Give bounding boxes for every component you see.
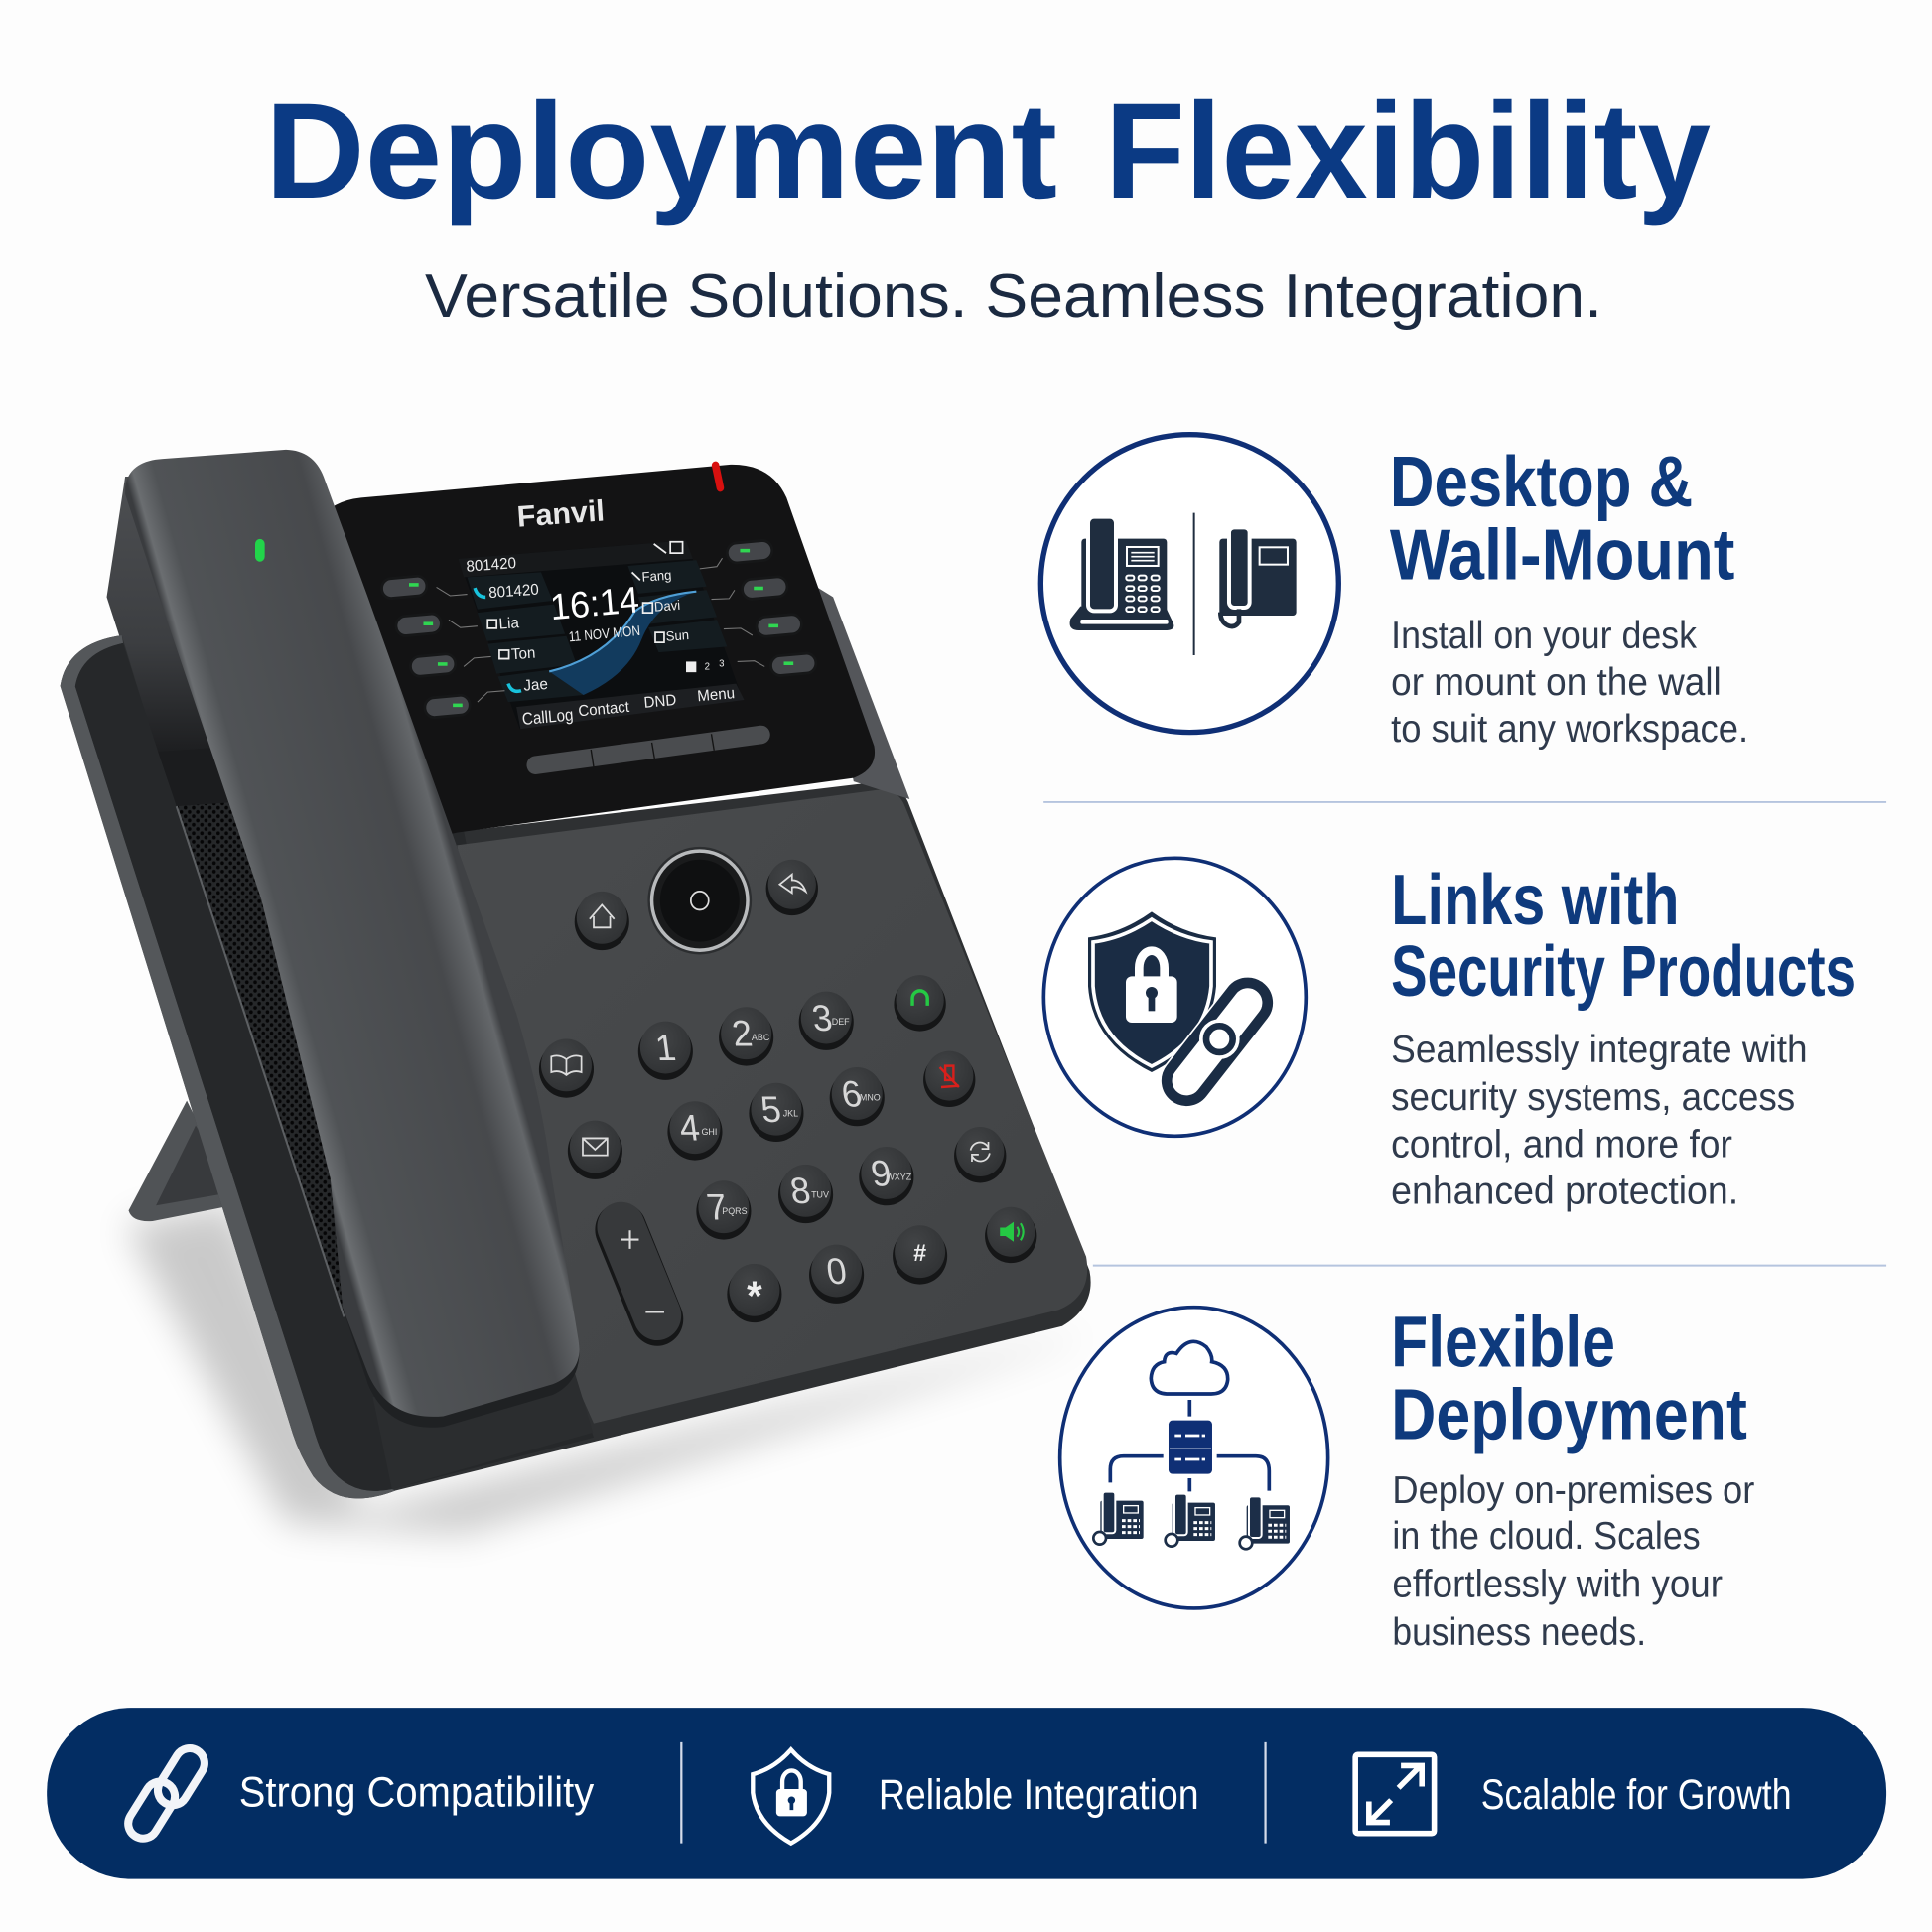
line keys <box>381 540 817 718</box>
screen panel <box>327 465 875 842</box>
keypad buttons: 2 <box>730 1013 755 1054</box>
body: security products: Seamlessly integrate with <box>1391 1029 1808 1071</box>
label: strong compatibility: Strong Compatibility <box>239 1768 595 1815</box>
display wallpaper swoosh <box>549 592 696 695</box>
phone display: Davi <box>653 598 681 615</box>
keypad buttons: JKL <box>783 1108 798 1118</box>
body: desktop and wall-mount <box>1391 615 1748 751</box>
heading: security products: Links with <box>1391 861 1680 940</box>
phone display <box>459 540 745 729</box>
cloud <box>1151 1341 1228 1394</box>
phone display: Lia <box>498 615 520 633</box>
handset lip shadow <box>343 1308 580 1428</box>
body: flexible deployment: business needs. <box>1392 1611 1646 1654</box>
keypad buttons: 9 <box>869 1153 894 1193</box>
bottom benefits bar <box>47 1708 1886 1879</box>
screen panel side edge <box>816 587 909 799</box>
keypad buttons: * <box>747 1273 762 1318</box>
title: Flexibility <box>1105 75 1711 227</box>
phone display: Sun <box>665 627 689 644</box>
heading: security products <box>1391 861 1856 1012</box>
keypad buttons: 5 <box>759 1089 783 1130</box>
feature icon: shield and link <box>1043 858 1306 1136</box>
keypad buttons: # <box>913 1240 926 1267</box>
soft keys <box>535 734 761 767</box>
phone display: Fang <box>641 567 672 585</box>
body: flexible deployment <box>1392 1469 1754 1654</box>
subtitle: Versatile Solutions. Seamless Integration. <box>425 262 1602 331</box>
network phone 1 <box>1093 1492 1144 1545</box>
keypad buttons: 8 <box>787 1171 813 1211</box>
phone display: Contact <box>578 699 630 720</box>
network phone 3 <box>1240 1496 1290 1549</box>
body: security products: control, and more for <box>1391 1123 1732 1166</box>
feature icon: desktop and wall phones <box>1040 435 1338 733</box>
body: flexible deployment: in the cloud. Scales <box>1392 1515 1701 1558</box>
back plate <box>75 643 594 1491</box>
kickstand <box>129 1101 224 1221</box>
phone display: 11 NOV MON <box>568 622 641 644</box>
feature icon: cloud deployment <box>1060 1308 1328 1608</box>
keypad buttons: DEF <box>832 1017 850 1027</box>
keypad plate <box>457 790 1087 1424</box>
phone display: 801420 <box>488 581 539 602</box>
keypad buttons: 6 <box>839 1073 865 1114</box>
keypad buttons: MNO <box>860 1092 881 1103</box>
navigation ring <box>647 847 752 954</box>
icon: scale arrows <box>1355 1754 1435 1834</box>
body: flexible deployment: effortlessly with your <box>1392 1563 1723 1605</box>
heading: desktop and wall-mount: Desktop & <box>1390 443 1693 522</box>
handset cradle foot <box>372 1370 593 1489</box>
phone product illustration <box>61 450 1091 1533</box>
handset back <box>107 477 265 754</box>
speaker grille <box>158 746 381 1349</box>
handset status LED <box>255 539 265 562</box>
keypad buttons: ABC <box>752 1033 770 1042</box>
heading: flexible deployment <box>1391 1303 1747 1455</box>
label: scalable for growth: Scalable for Growth <box>1481 1771 1792 1818</box>
title <box>265 75 1711 227</box>
icon: shield lock <box>753 1749 829 1844</box>
keypad buttons: 1 <box>653 1027 678 1068</box>
phone display: CallLog <box>521 705 574 729</box>
keypad buttons <box>539 860 1036 1322</box>
keypad buttons: TUV <box>811 1189 830 1199</box>
body: security products: security systems, access <box>1391 1076 1795 1119</box>
heading: flexible deployment: Flexible <box>1391 1303 1615 1382</box>
keypad buttons: PQRS <box>722 1206 748 1216</box>
keypad buttons: 7 <box>704 1186 730 1228</box>
keypad buttons: WXYZ <box>886 1172 912 1182</box>
body: security products <box>1391 1029 1808 1213</box>
keypad buttons: 4 <box>677 1107 702 1149</box>
base outer rim highlight <box>61 635 395 1498</box>
right column text <box>47 443 1886 1879</box>
floor shadow <box>125 1203 1089 1533</box>
body: desktop and wall-mount: or mount on the wall <box>1391 661 1722 704</box>
soft label bar <box>516 684 745 729</box>
heading: desktop and wall-mount: Wall-Mount <box>1390 515 1734 595</box>
phone base body <box>61 635 1091 1498</box>
body: flexible deployment: Deploy on-premises or <box>1392 1469 1754 1512</box>
keypad buttons: 0 <box>824 1250 849 1292</box>
label: reliable integration: Reliable Integration <box>879 1771 1199 1818</box>
connectors <box>1110 1400 1269 1491</box>
phone display: Ton <box>510 644 536 663</box>
phone display: 16:14 <box>548 579 640 627</box>
heading: desktop and wall-mount <box>1390 443 1734 595</box>
handset <box>125 450 580 1417</box>
server <box>1169 1421 1212 1474</box>
heading: flexible deployment: Deployment <box>1391 1376 1747 1455</box>
body: desktop and wall-mount: to suit any workspace. <box>1391 708 1748 751</box>
phone display: Jae <box>523 676 548 695</box>
phone display: 2 <box>705 661 710 672</box>
body: security products: enhanced protection. <box>1391 1171 1738 1213</box>
keypad buttons: GHI <box>701 1127 717 1137</box>
phone display: DND <box>643 692 677 712</box>
red indicator <box>716 466 720 487</box>
volume key <box>621 1227 664 1319</box>
network phone 2 <box>1166 1494 1215 1547</box>
keypad buttons: 3 <box>809 997 835 1038</box>
phone display: Menu <box>697 685 736 705</box>
body: desktop and wall-mount: Install on your desk <box>1391 615 1698 657</box>
title: Deployment <box>265 75 1057 227</box>
phone display: 3 <box>719 658 725 669</box>
phone display: 801420 <box>466 555 517 576</box>
brand logo: Fanvil <box>516 494 606 534</box>
icon: chain link <box>123 1742 210 1844</box>
